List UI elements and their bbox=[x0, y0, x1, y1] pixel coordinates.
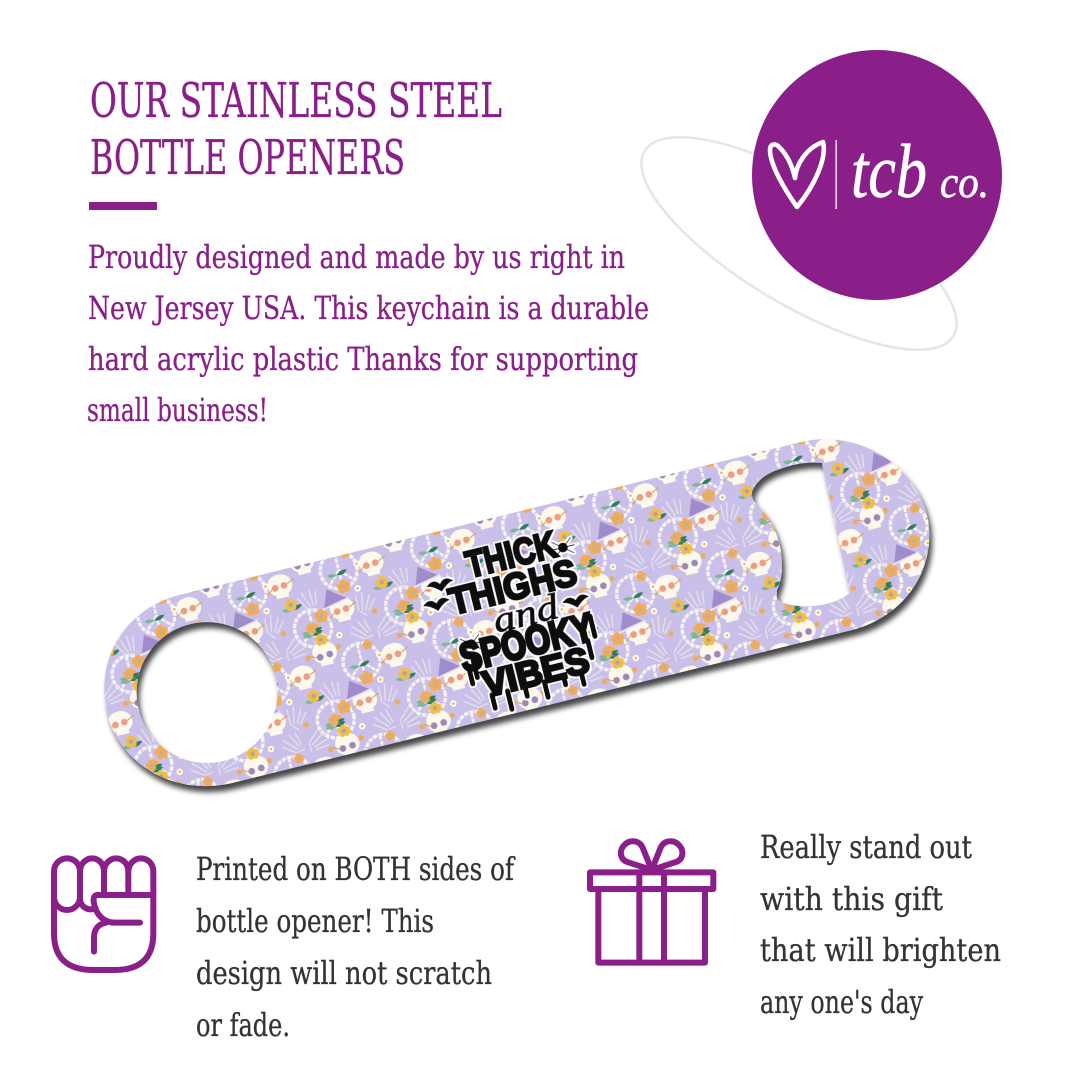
icon: raised fist bbox=[54, 858, 153, 970]
gift caption: any one's day bbox=[760, 983, 923, 1021]
gift caption: Really stand out bbox=[760, 828, 972, 866]
slogan words: VIBES bbox=[478, 639, 593, 705]
fist caption: bottle opener! This bbox=[196, 902, 434, 940]
intro text block bbox=[87, 238, 649, 429]
intro text block: New Jersey USA. This keychain is a durable bbox=[88, 289, 649, 327]
opener body bbox=[104, 439, 929, 786]
intro text block: hard acrylic plastic Thanks for supporting bbox=[88, 340, 638, 378]
gift caption: that will brighten bbox=[760, 931, 1001, 969]
slogan words: and bbox=[489, 586, 564, 641]
icon: bats and spiders bbox=[415, 536, 596, 661]
fist caption: or fade. bbox=[196, 1006, 290, 1044]
heading bbox=[90, 73, 502, 186]
heading: OUR STAINLESS STEEL bbox=[90, 73, 502, 129]
heading underline bbox=[89, 202, 157, 210]
logo wordmark: tcb bbox=[851, 130, 927, 214]
slogan graphic bbox=[411, 519, 611, 724]
bottle opener product bbox=[104, 439, 929, 786]
slogan words bbox=[434, 520, 605, 709]
slogan words: SPOOKY bbox=[455, 605, 598, 681]
gift caption: with this gift bbox=[760, 880, 943, 918]
logo divider bbox=[835, 140, 837, 209]
logo wordmark: co. bbox=[940, 158, 989, 207]
logo badge bbox=[752, 50, 1002, 300]
slogan words: THIGHS bbox=[445, 552, 581, 623]
logo wordmark bbox=[851, 130, 989, 214]
icon: gift box bbox=[590, 841, 713, 963]
fist caption bbox=[196, 850, 516, 1044]
paint drips bbox=[464, 616, 607, 717]
fist caption: Printed on BOTH sides of bbox=[196, 850, 516, 888]
intro text block: small business! bbox=[87, 391, 268, 429]
slogan words: THICK bbox=[462, 524, 561, 585]
decorative ring behind logo bbox=[613, 99, 985, 388]
intro text block: Proudly designed and made by us right in bbox=[88, 238, 625, 276]
fist caption: design will not scratch bbox=[196, 954, 492, 992]
heading: BOTTLE OPENERS bbox=[90, 130, 405, 186]
gift caption bbox=[760, 828, 1001, 1021]
icon: heart bbox=[770, 142, 824, 207]
